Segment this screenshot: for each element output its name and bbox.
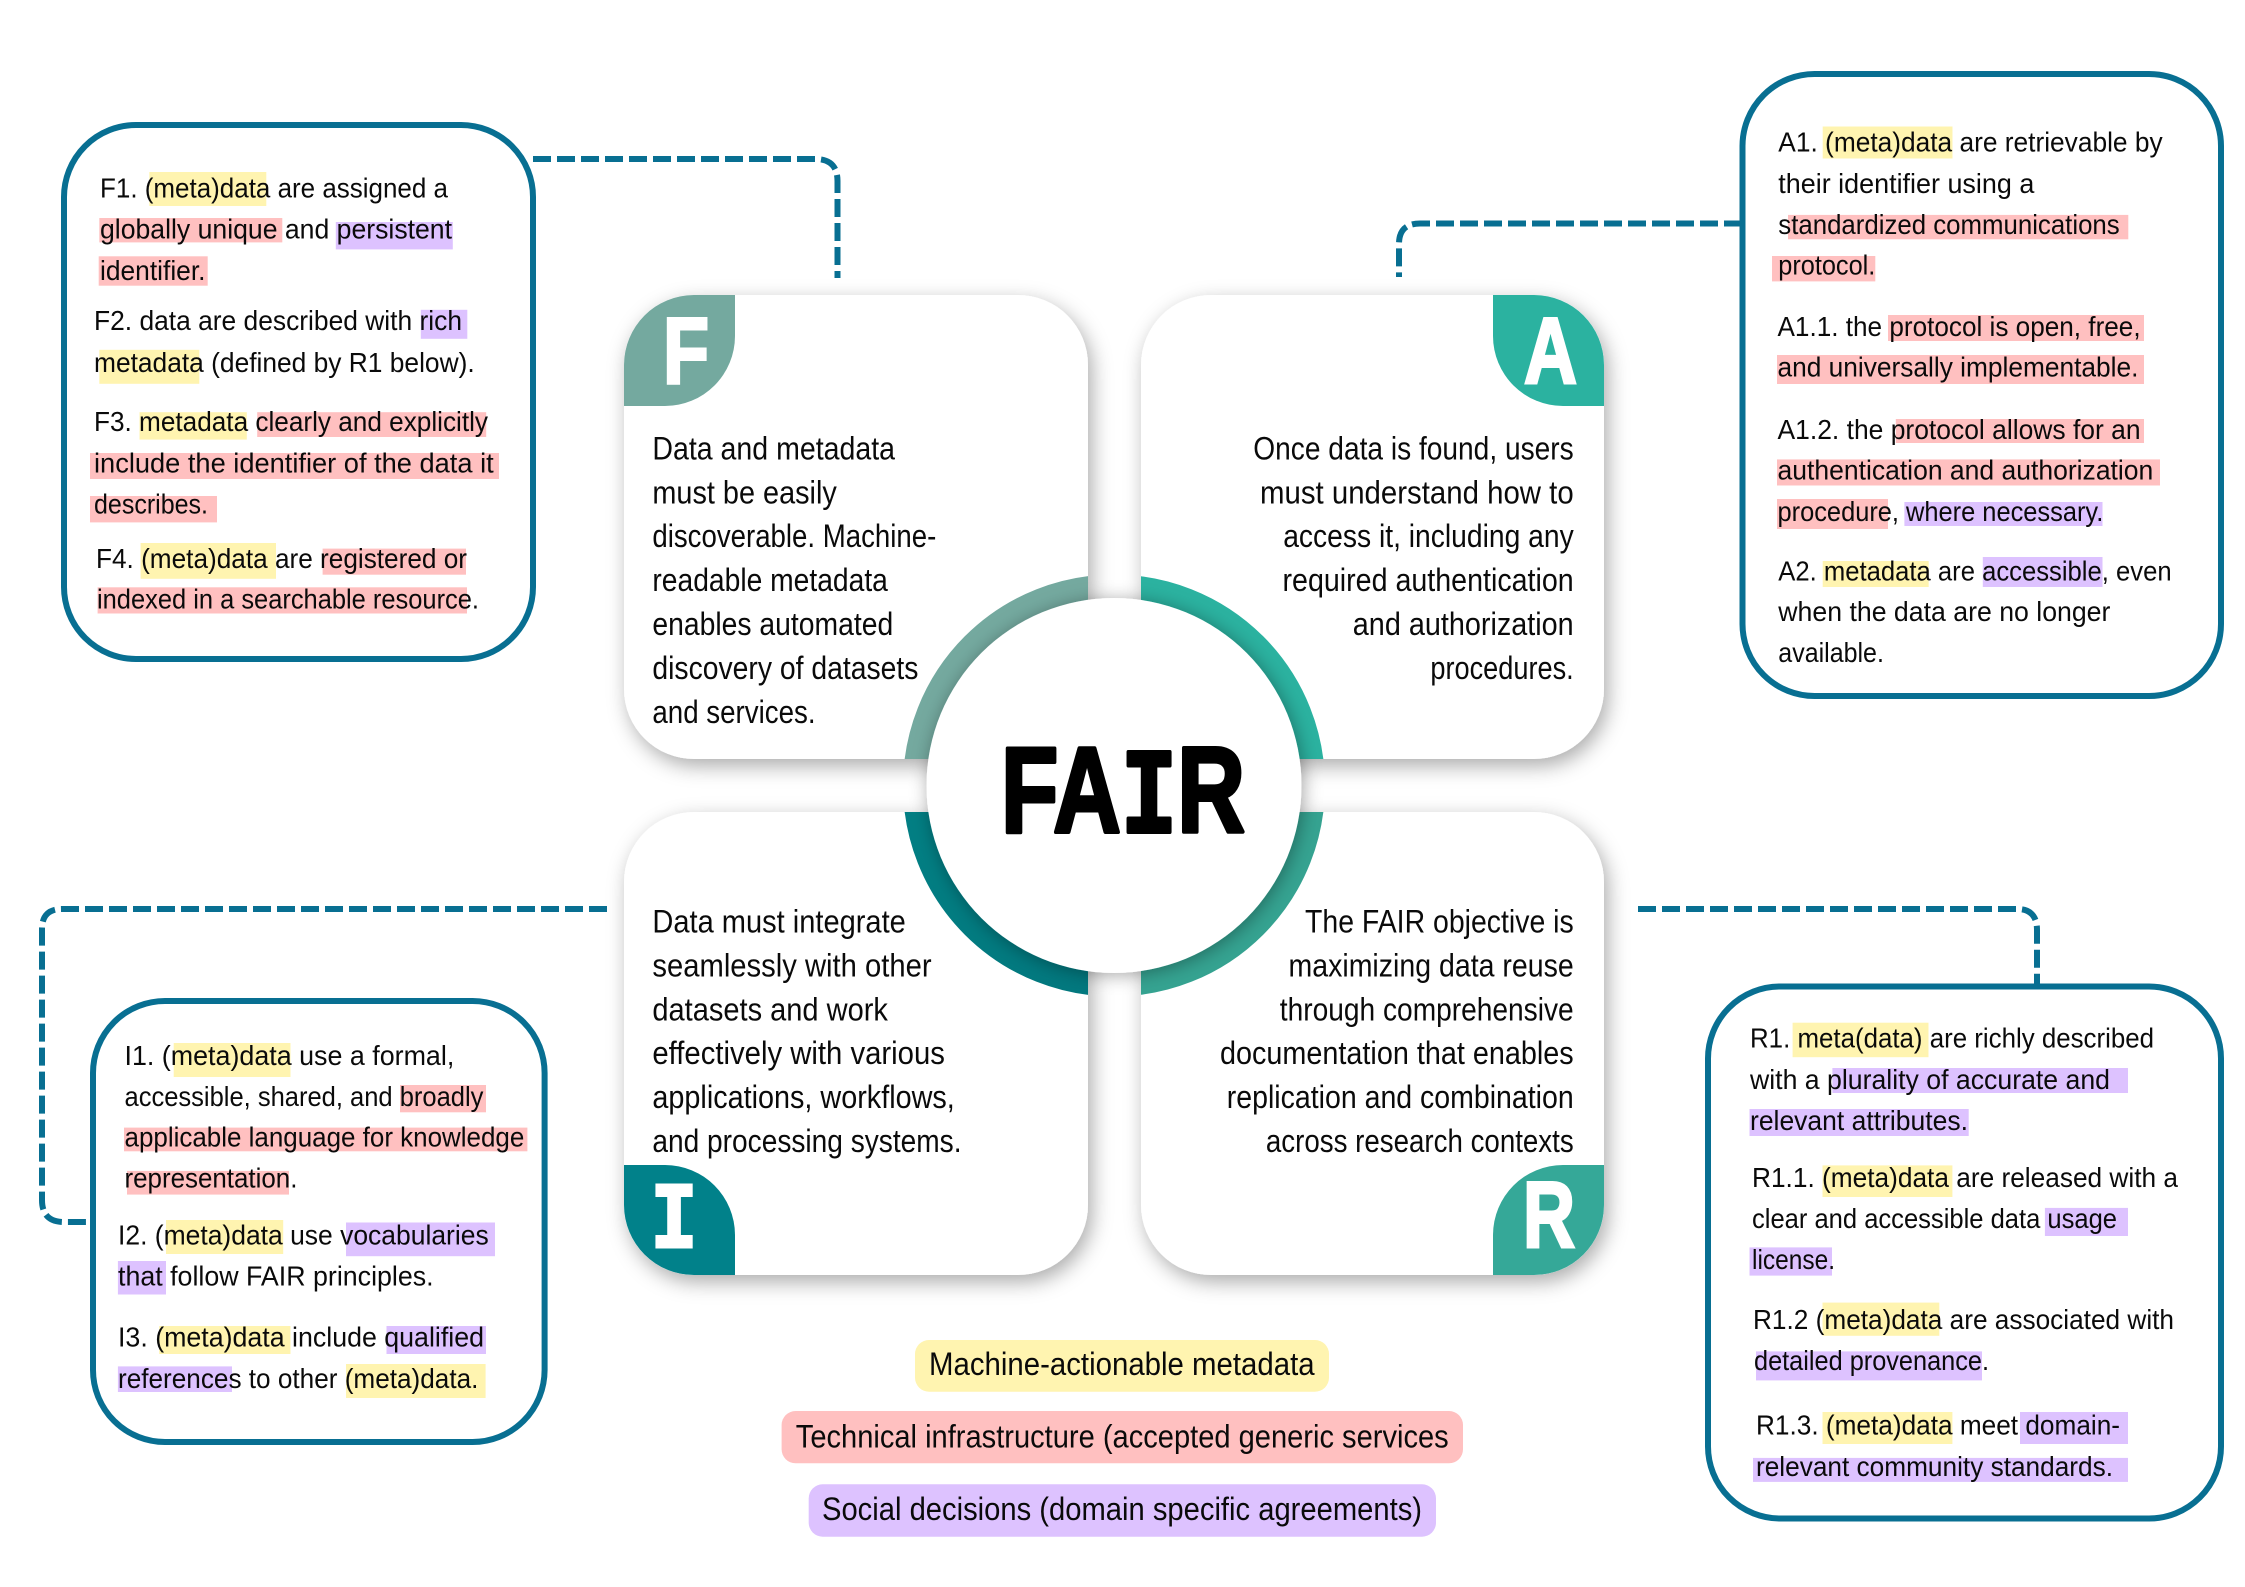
text block: F description: readable metadata — [652, 562, 888, 598]
text block: R1.3 — [1753, 1410, 2128, 1482]
icon: I tab — [624, 1165, 735, 1276]
text block: I description: effectively with various — [652, 1035, 945, 1071]
text block: F1 — [99, 172, 453, 286]
text block: F4 — [96, 543, 479, 615]
text block: R1.3: relevant community standards. — [1756, 1451, 2113, 1482]
text block: R1 — [1749, 1023, 2154, 1136]
panel: A callout — [1742, 74, 2221, 696]
text block: I description: datasets and work — [652, 992, 889, 1028]
text block: I1: I1. (meta)data use a formal, — [124, 1040, 454, 1071]
text block: A description: access it, including any — [1283, 518, 1574, 554]
text block: I2 — [118, 1220, 495, 1294]
icon: F tab — [624, 295, 735, 406]
text block: F3: include the identifier of the data it — [94, 448, 494, 479]
text block: A description — [1253, 430, 1574, 686]
text block: I3: references to other (meta)data. — [118, 1363, 478, 1394]
text block: R description: documentation that enables — [1220, 1035, 1574, 1071]
text block: A1.2: procedure, where necessary. — [1778, 496, 2103, 527]
panel: I card — [624, 812, 1088, 1276]
text block: F description: discovery of datasets — [652, 650, 918, 686]
legend — [782, 1340, 1463, 1537]
text block: A1: standardized communications — [1778, 209, 2120, 240]
text block: I description: Data must integrate — [652, 904, 906, 940]
legend item: machine-actionable metadata — [915, 1340, 1329, 1392]
text block: A description: must understand how to — [1260, 474, 1574, 510]
text block: I2: I2. (meta)data use vocabularies — [118, 1220, 489, 1251]
text block: A1: A1. (meta)data are retrievable by — [1778, 127, 2163, 158]
icon: I tab: I — [651, 1170, 697, 1276]
text block: I1: accessible, shared, and broadly — [124, 1081, 483, 1112]
text block: F4: indexed in a searchable resource. — [97, 584, 479, 615]
legend item: social decisions — [809, 1484, 1436, 1537]
text block: F2 — [94, 305, 475, 384]
text block: A1: their identifier using a — [1778, 168, 2035, 199]
panel: R card — [1141, 812, 1604, 1275]
text block: F description: must be easily — [652, 474, 837, 510]
text block: A1 — [1772, 126, 2163, 281]
panel: R callout — [1708, 986, 2221, 1518]
text block: A description: required authentication — [1282, 562, 1574, 598]
text block: F2: F2. data are described with rich — [94, 305, 462, 336]
text block: F2: metadata (defined by R1 below). — [94, 347, 475, 378]
panel: A card — [1141, 295, 1604, 759]
text block: F4: F4. (meta)data are registered or — [96, 543, 467, 574]
text block: A2: A2. metadata are accessible, even — [1778, 556, 2172, 587]
icon: A tab: A — [1524, 298, 1577, 403]
text block: I1: representation. — [124, 1163, 297, 1194]
text block: A1.1: and universally implementable. — [1778, 352, 2138, 382]
text block: F1: identifier. — [100, 255, 206, 286]
text block: F description: enables automated — [652, 606, 893, 642]
text block: R1.1 — [1750, 1162, 2178, 1276]
connector: R callout to R card — [1638, 909, 2037, 986]
text block: R description: maximizing data reuse — [1288, 948, 1574, 984]
icon: A tab — [1493, 295, 1604, 406]
text block: A1.2 — [1777, 414, 2160, 529]
text block: R description: across research contexts — [1266, 1123, 1574, 1159]
text block: F3: F3. metadata clearly and explicitly — [94, 406, 488, 437]
text block: F description — [652, 430, 936, 730]
connector: A callout to A card — [1399, 224, 1742, 277]
text block: F3 — [90, 406, 499, 522]
text block: I description: applications, workflows, — [652, 1079, 955, 1115]
text block: R1: with a plurality of accurate and — [1749, 1064, 2110, 1095]
title: FAIR — [1001, 722, 1245, 869]
text block: R1.1: license. — [1752, 1244, 1835, 1275]
text block: A1.1 — [1777, 311, 2144, 384]
text block: R1: relevant attributes. — [1750, 1105, 1968, 1136]
text block: R1: R1. meta(data) are richly described — [1750, 1023, 2154, 1054]
text block: R1.2: R1.2 (meta)data are associated with — [1753, 1304, 2174, 1335]
text block: A2: when the data are no longer — [1777, 596, 2110, 627]
text block: I1 — [124, 1040, 527, 1195]
text block: A2: available. — [1778, 637, 1884, 668]
text block: F description: Data and metadata — [652, 430, 895, 466]
text block: I description: and processing systems. — [652, 1123, 962, 1159]
text block: A1: protocol. — [1778, 250, 1875, 281]
connector: I callout to I card — [42, 909, 607, 1222]
legend item: machine-actionable metadata: Machine-actionable metadata — [929, 1346, 1315, 1382]
text block: R description: replication and combination — [1227, 1079, 1574, 1115]
text block: A1.1: A1.1. the protocol is open, free, — [1778, 311, 2141, 342]
connector: F callout to F card — [533, 159, 838, 278]
text block: R description: through comprehensive — [1280, 992, 1574, 1028]
text block: R1.2: detailed provenance. — [1754, 1345, 1989, 1376]
text block: I description: seamlessly with other — [652, 948, 932, 984]
text block: I description — [652, 904, 962, 1159]
text block: R1.3: R1.3. (meta)data meet domain- — [1756, 1410, 2120, 1441]
text block: F description: discoverable. Machine- — [652, 518, 936, 554]
text block: A description: and authorization — [1353, 606, 1574, 642]
text block: I3: I3. (meta)data include qualified — [118, 1322, 484, 1352]
text block: F1: globally unique and persistent — [100, 213, 452, 244]
legend item: technical infrastructure — [782, 1411, 1463, 1463]
centre circle with title — [926, 598, 1302, 973]
text block: F1: F1. (meta)data are assigned a — [100, 173, 448, 204]
panel: F callout — [64, 125, 533, 659]
panel: F card — [624, 295, 1088, 759]
text block: I1: applicable language for knowledge — [124, 1122, 524, 1153]
text block: A1.2: A1.2. the protocol allows for an — [1778, 414, 2141, 445]
icon: R tab — [1493, 1162, 1604, 1275]
text block: A2 — [1777, 556, 2172, 668]
icon: F tab: F — [663, 298, 709, 403]
panel: I callout — [93, 1001, 545, 1442]
text block: F description: and services. — [652, 694, 816, 730]
text block: A1.2: authentication and authorization — [1778, 455, 2153, 486]
text block: I2: that follow FAIR principles. — [118, 1261, 434, 1292]
text block: R description — [1220, 904, 1574, 1159]
text block: I3 — [118, 1322, 486, 1398]
ring: four coloured quadrants — [916, 588, 1312, 984]
text block: R1.1: R1.1. (meta)data are released with a — [1752, 1162, 2178, 1193]
legend item: technical infrastructure: Technical infrastructure (accepted generic services — [796, 1418, 1449, 1454]
text block: R description: The FAIR objective is — [1305, 904, 1574, 940]
text block: R1.1: clear and accessible data usage — [1752, 1203, 2117, 1234]
legend item: social decisions: Social decisions (domain specific agreements) — [822, 1491, 1422, 1527]
text block: A description: procedures. — [1430, 650, 1574, 686]
text block: F3: describes. — [94, 488, 208, 520]
text block: R1.2 — [1753, 1303, 2174, 1380]
icon: R tab: R — [1523, 1162, 1575, 1267]
text block: A description: Once data is found, users — [1253, 430, 1574, 466]
